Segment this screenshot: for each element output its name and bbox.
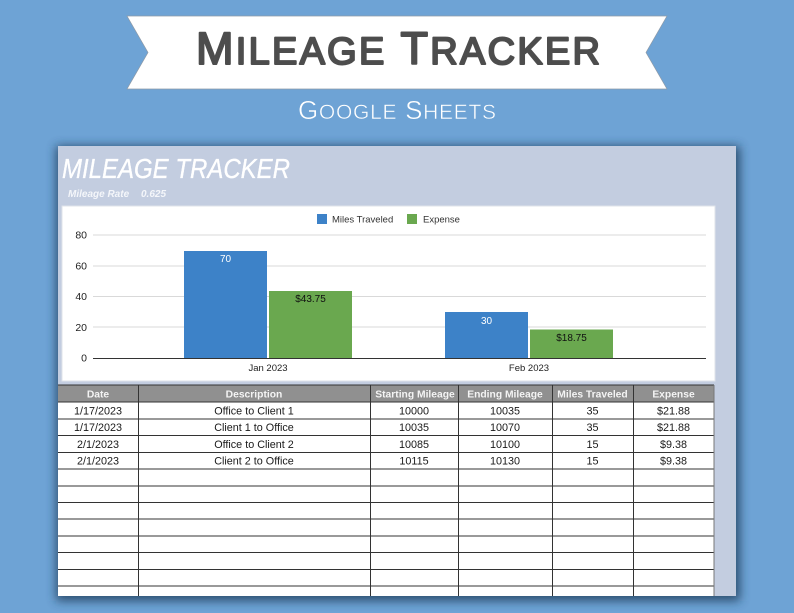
row 3: 10085 [399,439,429,451]
row 1: 10000 [399,406,429,418]
bars: $18.75 [556,333,587,344]
subtitle: GOOGLE SHEETS [298,95,496,125]
bars [184,251,613,358]
row 1: 1/17/2023 [74,406,122,418]
row 2 [74,422,690,434]
bars: 30 [481,316,492,327]
table header [58,385,714,402]
x axis labels: Feb 2023 [509,363,549,374]
chart panel [62,206,715,381]
row 3: Office to Client 2 [214,439,294,451]
mileage rate: Mileage Rate [68,189,130,200]
row 3: 2/1/2023 [77,439,119,451]
sheet title: MILEAGE TRACKER [62,153,290,184]
table [58,385,714,596]
row 3 [77,439,687,451]
mileage rate [68,189,166,200]
banner ribbon [127,16,667,89]
gridlines and y axis: 60 [75,260,87,272]
row 4: Client 2 to Office [214,456,294,468]
gridlines and y axis: 80 [75,230,87,242]
panel: spreadsheet [56,146,740,601]
bars: 70 [220,254,231,265]
table header: Date [87,390,109,400]
gridlines and y axis: 0 [81,352,87,364]
row 2: 35 [586,422,599,434]
bars: $43.75 [295,294,326,305]
row 3: 10100 [490,439,520,451]
row 4: 10130 [490,456,520,468]
row 1: 35 [586,406,599,418]
row 4: 15 [586,456,599,468]
title: MILEAGE TRACKER [196,23,600,74]
table rows [74,406,690,468]
row 1: $21.88 [657,406,690,418]
table header: Description [226,390,282,400]
row 4 [77,456,687,468]
table header: Starting Mileage [375,390,455,400]
gridlines and y axis: 20 [75,322,87,334]
row 2: $21.88 [657,422,690,434]
legend: Miles Traveled [332,214,393,226]
row 2: 10035 [399,422,429,434]
row 4: $9.38 [660,456,687,468]
gridlines and y axis [75,230,706,364]
gridlines and y axis: 40 [75,291,87,303]
x axis labels [248,363,549,374]
row 3: $9.38 [660,439,687,451]
row 1: Office to Client 1 [214,406,294,418]
table header: Miles Traveled [557,390,628,400]
table header: Expense [652,390,695,400]
row 1 [74,406,690,418]
row 2: Client 1 to Office [214,422,294,434]
row 3: 15 [586,439,599,451]
x axis labels: Jan 2023 [248,363,288,374]
row 1: 10035 [490,406,520,418]
legend [317,214,460,226]
mileage rate: 0.625 [141,189,166,200]
row 2: 10070 [490,422,520,434]
legend: Expense [423,214,460,226]
row 2: 1/17/2023 [74,422,122,434]
table header: Ending Mileage [467,390,543,400]
row 4: 2/1/2023 [77,456,119,468]
row 4: 10115 [399,456,429,468]
